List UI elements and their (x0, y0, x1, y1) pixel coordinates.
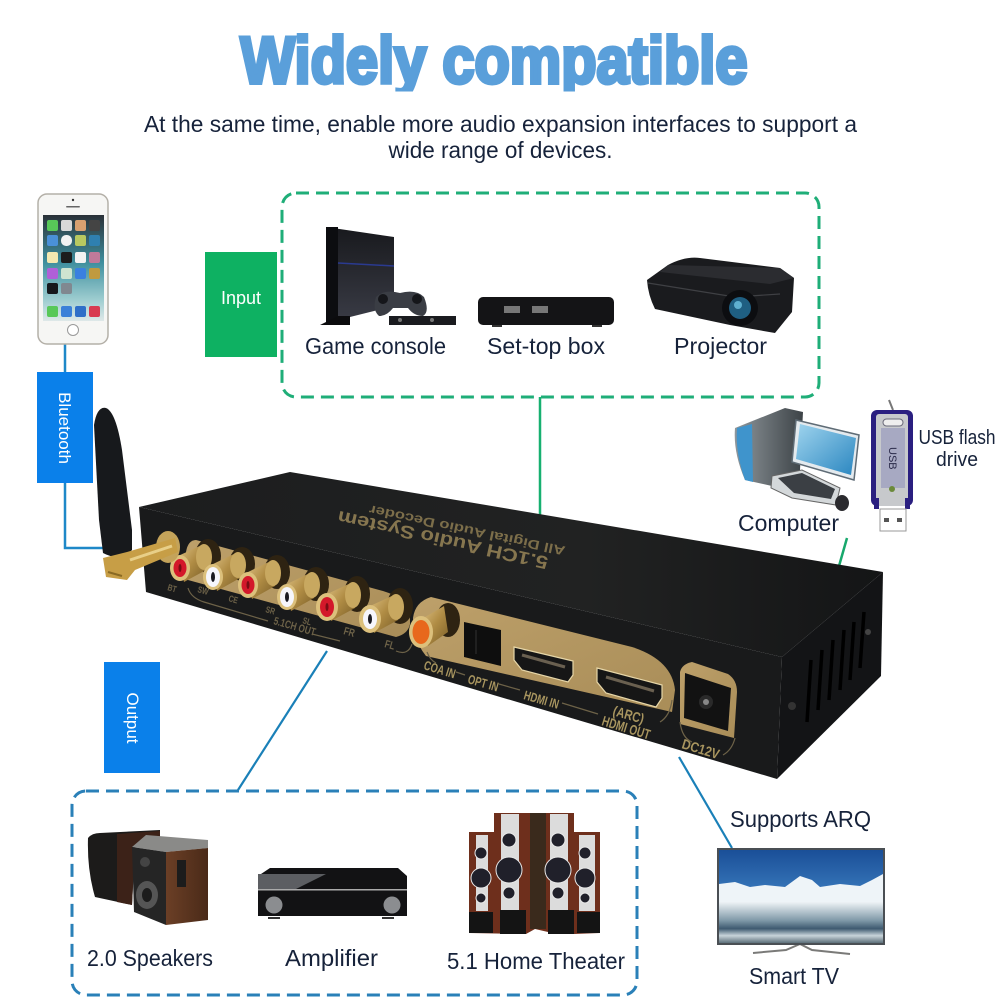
small channel labels: SR (264, 604, 276, 617)
icon: smart TV (717, 848, 885, 954)
device: audio decoder (139, 472, 883, 779)
device side face (777, 572, 883, 779)
label: amplifier: Amplifier (285, 945, 378, 971)
device top face: 5.1CH Audio System (336, 507, 550, 573)
DC panel (680, 662, 737, 738)
input tag: Input (221, 288, 261, 308)
port labels: OPT IN (466, 673, 500, 695)
output tag: Output (123, 692, 142, 744)
port labels: HDMI IN (522, 689, 560, 712)
bluetooth tag (37, 372, 93, 483)
orange coaxial jack (409, 603, 460, 648)
icon: smartphone (38, 194, 108, 344)
label: set-top box: Set-top box (487, 333, 605, 359)
label: supports ARQ: Supports ARQ (730, 806, 871, 832)
HDMI out port (597, 668, 662, 707)
label: projector: Projector (674, 333, 767, 359)
icon: USB flash drive (871, 400, 913, 531)
DC socket (684, 673, 731, 731)
label: computer: Computer (738, 510, 839, 536)
port labels: DC12V (680, 736, 722, 762)
icon: game console (320, 227, 456, 325)
port bracket lines (188, 588, 735, 755)
icon: set-top box (478, 297, 614, 327)
bluetooth tag: Bluetooth (55, 392, 74, 464)
icon: speakers (88, 830, 208, 925)
small channel labels: 5.1CH OUT (272, 615, 317, 639)
device top face: All Digital Audio Decoder (368, 502, 566, 559)
label: game console: Game console (305, 333, 446, 359)
panel: output devices (72, 791, 637, 995)
small channel labels: SL (301, 615, 313, 628)
icon: USB flash drive: USB (886, 447, 898, 470)
small channel labels: SW (196, 584, 210, 597)
connector: computer line (839, 538, 847, 566)
label: smart TV: Smart TV (749, 963, 840, 989)
small channel labels: FL (383, 638, 396, 653)
port labels: COA IN (422, 659, 457, 682)
subtitle: wide range of devices. (388, 137, 612, 163)
connector: input line (539, 397, 541, 586)
connector: TV line (679, 757, 732, 848)
device top face (139, 472, 883, 657)
title: Widely compatible (240, 23, 748, 97)
optical port (464, 622, 501, 666)
icon: antenna (94, 408, 180, 580)
label: home theater: 5.1 Home Theater (447, 948, 625, 974)
label: USB flash drive (918, 427, 996, 471)
small channel labels (166, 582, 396, 653)
icon: home theater (469, 813, 600, 934)
small channel labels: BT (166, 582, 178, 595)
small channel labels: FR (342, 625, 356, 640)
subtitle (144, 111, 857, 163)
icon: projector (647, 258, 794, 333)
input tag (205, 252, 277, 357)
connector: bluetooth line (65, 344, 104, 548)
port labels (422, 659, 722, 762)
output tag (104, 662, 160, 773)
icon: amplifier (258, 868, 407, 919)
device front face (139, 507, 782, 779)
port labels: (ARC) (611, 703, 646, 727)
gold panel: RCA outputs (186, 540, 410, 637)
label: USB flash drive: drive (936, 449, 978, 471)
small channel labels: CE (227, 593, 239, 606)
gold panel: inputs (413, 597, 675, 712)
panel: input devices (282, 193, 819, 397)
HDMI in port (514, 647, 573, 682)
port labels: HDMI OUT (600, 713, 653, 743)
subtitle: At the same time, enable more audio expansion interfaces to support a (144, 111, 857, 137)
RCA jack row (170, 539, 413, 633)
icon: computer (735, 408, 859, 511)
connector: output line (238, 651, 327, 790)
label: speakers: 2.0 Speakers (87, 945, 213, 971)
